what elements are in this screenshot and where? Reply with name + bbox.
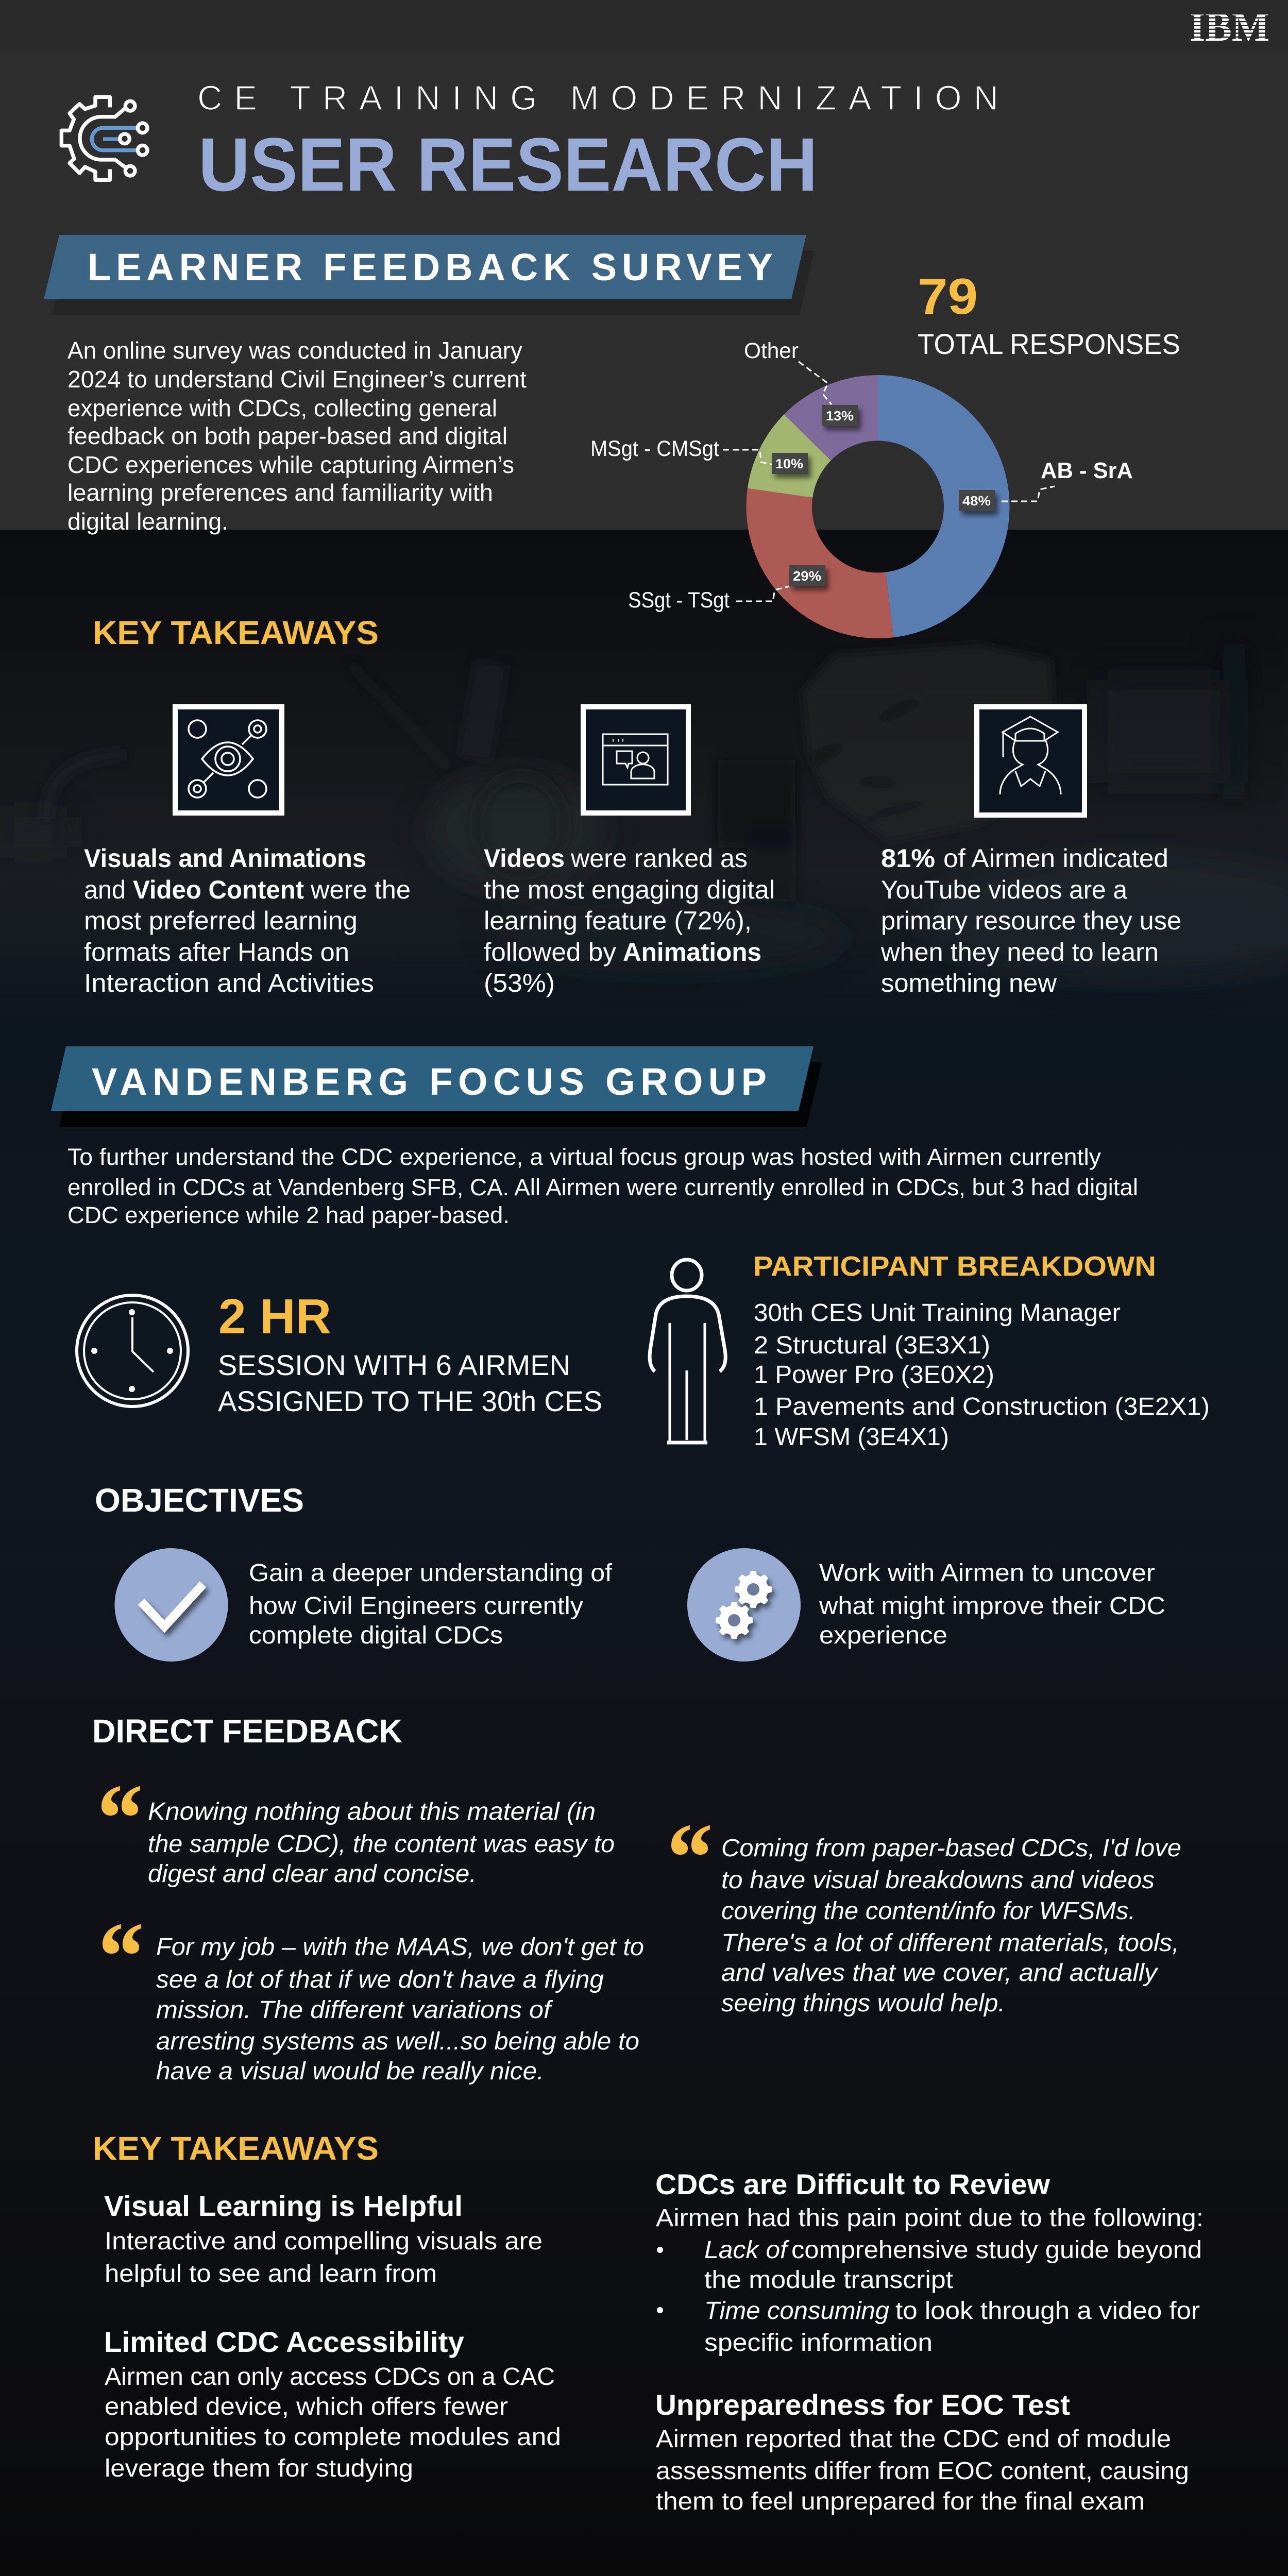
value label: 48%: 48% <box>962 493 991 509</box>
icon: gear with circuit lines <box>61 97 147 180</box>
logo: IBM: IBM <box>1190 5 1269 50</box>
text block: survey intro: learning preferences and familiarity with <box>67 479 493 506</box>
text block: takeaway visuals and animations: Visuals and Animations <box>84 844 366 873</box>
takeaway: limited accessibility: leverage them for studying <box>105 2455 413 2482</box>
icon: gears circle <box>687 1548 801 1662</box>
value label: 29% <box>789 565 825 586</box>
text block: focus group intro: To further understand the CDC experience, a virtual focus group was hosted with Airmen currently <box>67 1144 1101 1170</box>
text block: objective 1: how Civil Engineers currently <box>249 1592 583 1620</box>
takeaway: unpreparedness: them to feel unprepared for the final exam <box>656 2488 1145 2515</box>
icon: eye network <box>175 707 282 813</box>
takeaway: visual learning: Visual Learning is Helpful <box>104 2190 463 2222</box>
quote: MAAS visuals <box>93 1903 644 2085</box>
quote: paper-based learner: There's a lot of different materials, tools, <box>721 1929 1179 1957</box>
heading: key takeaways (focus group): KEY TAKEAWAYS <box>93 2130 379 2167</box>
takeaway: limited accessibility: opportunities to complete modules and <box>105 2424 561 2451</box>
takeaway: visual learning: helpful to see and learn from <box>105 2260 437 2287</box>
quote: easy to digest <box>92 1765 615 1888</box>
takeaway: difficult to review: Lack of <box>704 2236 790 2264</box>
text block: takeaway videos: followed by <box>484 938 616 967</box>
category label: Other: Other <box>744 338 799 363</box>
quote: easy to digest: Knowing nothing about this material (in <box>148 1798 596 1825</box>
slice: MSgt - CMSgt 10% <box>748 414 831 498</box>
text block: objective 1 <box>249 1560 613 1649</box>
section banner: learner feedback survey: LEARNER FEEDBACK SURVEY <box>88 246 773 289</box>
takeaway: difficult to review: the module transcript <box>704 2266 953 2294</box>
icon: check circle <box>114 1548 228 1662</box>
value label: 10% <box>772 453 808 474</box>
icon: graduate <box>977 707 1084 815</box>
text block: takeaway visuals and animations <box>84 844 411 997</box>
text block: takeaway YouTube: YouTube videos are a <box>881 875 1127 904</box>
takeaway: difficult to review: Airmen had this pain point due to the following: <box>656 2205 1204 2232</box>
text block: focus group intro: enrolled in CDCs at Vandenberg SFB, CA. All Airmen were currently enrolled in CDCs, but 3 had digital <box>67 1174 1138 1200</box>
slice: Other 13% <box>784 375 878 461</box>
text block: takeaway visuals and animations: formats after Hands on <box>84 938 349 967</box>
slice: AB - SrA 48% <box>878 375 1010 637</box>
leader lines <box>723 362 1055 601</box>
list: participants <box>754 1299 1210 1451</box>
text block: takeaway visuals and animations: Video Content <box>133 875 304 904</box>
stat: session length <box>218 1289 602 1417</box>
text block: takeaway visuals and animations: most preferred learning <box>84 906 358 935</box>
text block: takeaway videos: (53%) <box>484 969 555 997</box>
quote: paper-based learner: and valves that we cover, and actually <box>721 1959 1159 1987</box>
text block: survey intro: 2024 to understand Civil Engineer’s current <box>67 366 527 393</box>
value label: 13% <box>822 405 858 426</box>
text block: takeaway videos: learning feature (72%), <box>484 906 752 935</box>
text block: survey intro: An online survey was conducted in January <box>67 337 522 364</box>
title: main heading: USER RESEARCH <box>198 123 818 207</box>
text block: takeaway YouTube: of Airmen indicated <box>943 844 1168 873</box>
icon: person <box>650 1260 725 1443</box>
text block: takeaway videos <box>484 844 775 997</box>
takeaway: difficult to review: CDCs are Difficult to Review <box>655 2168 1050 2200</box>
list: participants: 1 Power Pro (3E0X2) <box>754 1361 994 1388</box>
heading: participant breakdown: PARTICIPANT BREAKDOWN <box>753 1251 1156 1282</box>
text block: takeaway visuals and animations: were the <box>310 875 411 904</box>
stat: session length: SESSION WITH 6 AIRMEN <box>218 1349 570 1381</box>
value label: 48% <box>959 490 995 511</box>
text block: takeaway visuals and animations: and <box>84 875 126 904</box>
quote: paper-based learner: Coming from paper-based CDCs, I'd love <box>721 1835 1181 1862</box>
value label: 10%: 10% <box>775 456 803 471</box>
quote: paper-based learner: to have visual breakdowns and videos <box>721 1867 1155 1894</box>
takeaway: difficult to review: to look through a video for <box>895 2297 1200 2325</box>
quote: easy to digest: digest and clear and concise. <box>148 1860 477 1888</box>
stat: total responses: 79 <box>918 268 978 325</box>
list: participants: 30th CES Unit Training Manager <box>754 1299 1121 1327</box>
list: participants: 1 Pavements and Construction (3E2X1) <box>754 1393 1210 1420</box>
text block: objective 1: Gain a deeper understanding of <box>249 1560 613 1587</box>
stat: total responses: TOTAL RESPONSES <box>918 328 1180 360</box>
text block: focus group intro: CDC experience while 2 had paper-based. <box>67 1202 510 1228</box>
text block: takeaway YouTube: when they need to learn <box>880 938 1159 967</box>
text block: takeaway videos: Videos <box>484 844 565 873</box>
text block: takeaway videos: Animations <box>623 938 761 967</box>
takeaway: limited accessibility: enabled device, which offers fewer <box>105 2393 508 2420</box>
stat: session length: ASSIGNED TO THE 30th CES <box>218 1385 602 1417</box>
quote: paper-based learner: seeing things would help. <box>721 1990 1005 2017</box>
quote: easy to digest: “ <box>92 1765 141 1873</box>
value label: 29%: 29% <box>793 568 821 584</box>
heading: key takeaways (survey): KEY TAKEAWAYS <box>93 614 379 651</box>
participant breakdown <box>753 1251 1210 1451</box>
quote: paper-based learner: covering the content/info for WFSMs. <box>721 1897 1136 1925</box>
quote: paper-based learner <box>662 1804 1181 2017</box>
quote: MAAS visuals: mission. The different variations of <box>156 1996 553 2024</box>
quote: easy to digest: the sample CDC), the content was easy to <box>148 1831 615 1858</box>
quote: MAAS visuals: have a visual would be really nice. <box>156 2058 544 2085</box>
value label: 13%: 13% <box>826 408 854 423</box>
takeaway: difficult to review: specific information <box>704 2329 933 2357</box>
text block: takeaway visuals and animations: Interaction and Activities <box>84 969 374 997</box>
takeaway: unpreparedness: Airmen reported that the CDC end of module <box>656 2426 1171 2453</box>
text block: objective 2 <box>819 1560 1165 1649</box>
text block: takeaway videos: were ranked as <box>570 844 748 873</box>
text block: takeaway YouTube: something new <box>881 969 1057 997</box>
icon: video window <box>583 707 688 813</box>
text block: objective 2: experience <box>819 1622 947 1649</box>
takeaway: unpreparedness <box>655 2388 1189 2515</box>
category label: AB - SrA: AB - SrA <box>1041 458 1133 483</box>
list: participants: 2 Structural (3E3X1) <box>754 1332 990 1359</box>
heading: objectives: OBJECTIVES <box>95 1482 304 1519</box>
text block: survey intro: experience with CDCs, collecting general <box>67 395 497 421</box>
text block: focus group intro <box>67 1144 1138 1228</box>
text block: takeaway YouTube: 81% <box>881 844 935 873</box>
takeaway: difficult to review: comprehensive study guide beyond <box>791 2236 1202 2264</box>
stat: session length: 2 HR <box>218 1289 331 1344</box>
text block: takeaway YouTube: primary resource they use <box>881 906 1181 935</box>
quote: MAAS visuals: “ <box>93 1903 142 2011</box>
text block: survey intro <box>67 337 527 535</box>
takeaway: difficult to review: Time consuming <box>704 2297 889 2325</box>
list: participants: 1 WFSM (3E4X1) <box>754 1423 949 1451</box>
slice: SSgt - TSgt 29% <box>747 488 893 638</box>
quote: paper-based learner: “ <box>662 1804 711 1912</box>
category label: MSgt - CMSgt: MSgt - CMSgt <box>590 436 719 461</box>
takeaway: visual learning: Interactive and compelling visuals are <box>105 2228 543 2255</box>
takeaway: limited accessibility: Limited CDC Accessibility <box>104 2326 464 2358</box>
text block: objective 1: complete digital CDCs <box>249 1622 503 1649</box>
background: lower dark photo panel <box>0 530 1288 2576</box>
text block: objective 2: Work with Airmen to uncover <box>819 1560 1155 1587</box>
section banner: vandenberg focus group <box>51 1046 822 1127</box>
takeaway: difficult to review <box>655 2168 1204 2357</box>
heading: direct feedback: DIRECT FEEDBACK <box>92 1713 402 1750</box>
takeaway: limited accessibility: Airmen can only access CDCs on a CAC <box>105 2363 555 2391</box>
stat: total responses <box>918 268 1180 360</box>
text block: survey intro: digital learning. <box>67 508 228 535</box>
icon: clock <box>77 1295 188 1406</box>
text block: survey intro: feedback on both paper-based and digital <box>67 422 507 449</box>
section banner: learner feedback survey <box>44 235 815 315</box>
title: eyebrow: CE TRAINING MODERNIZATION <box>197 79 998 117</box>
top band <box>0 0 1288 53</box>
background: blurred photo of studying airman <box>0 644 1288 979</box>
quote: MAAS visuals: see a lot of that if we don't have a flying <box>156 1966 604 1993</box>
text block: takeaway videos: the most engaging digital <box>484 875 775 904</box>
text block: takeaway YouTube <box>880 844 1181 997</box>
quote: MAAS visuals: For my job – with the MAAS, we don't get to <box>156 1934 644 1961</box>
donut chart: respondents by rank <box>590 338 1133 638</box>
background: top header panel <box>0 0 1288 530</box>
quote: MAAS visuals: arresting systems as well...so being able to <box>156 2028 639 2055</box>
takeaway: limited accessibility <box>104 2326 561 2482</box>
takeaway: unpreparedness: assessments differ from EOC content, causing <box>656 2458 1189 2485</box>
takeaway: visual learning <box>104 2190 543 2287</box>
text block: objective 2: what might improve their CDC <box>819 1592 1165 1620</box>
category label: SSgt - TSgt: SSgt - TSgt <box>628 588 730 613</box>
section banner: vandenberg focus group: VANDENBERG FOCUS GROUP <box>92 1060 767 1103</box>
text block: survey intro: CDC experiences while capturing Airmen’s <box>67 451 514 478</box>
takeaway: unpreparedness: Unpreparedness for EOC Test <box>655 2388 1070 2421</box>
